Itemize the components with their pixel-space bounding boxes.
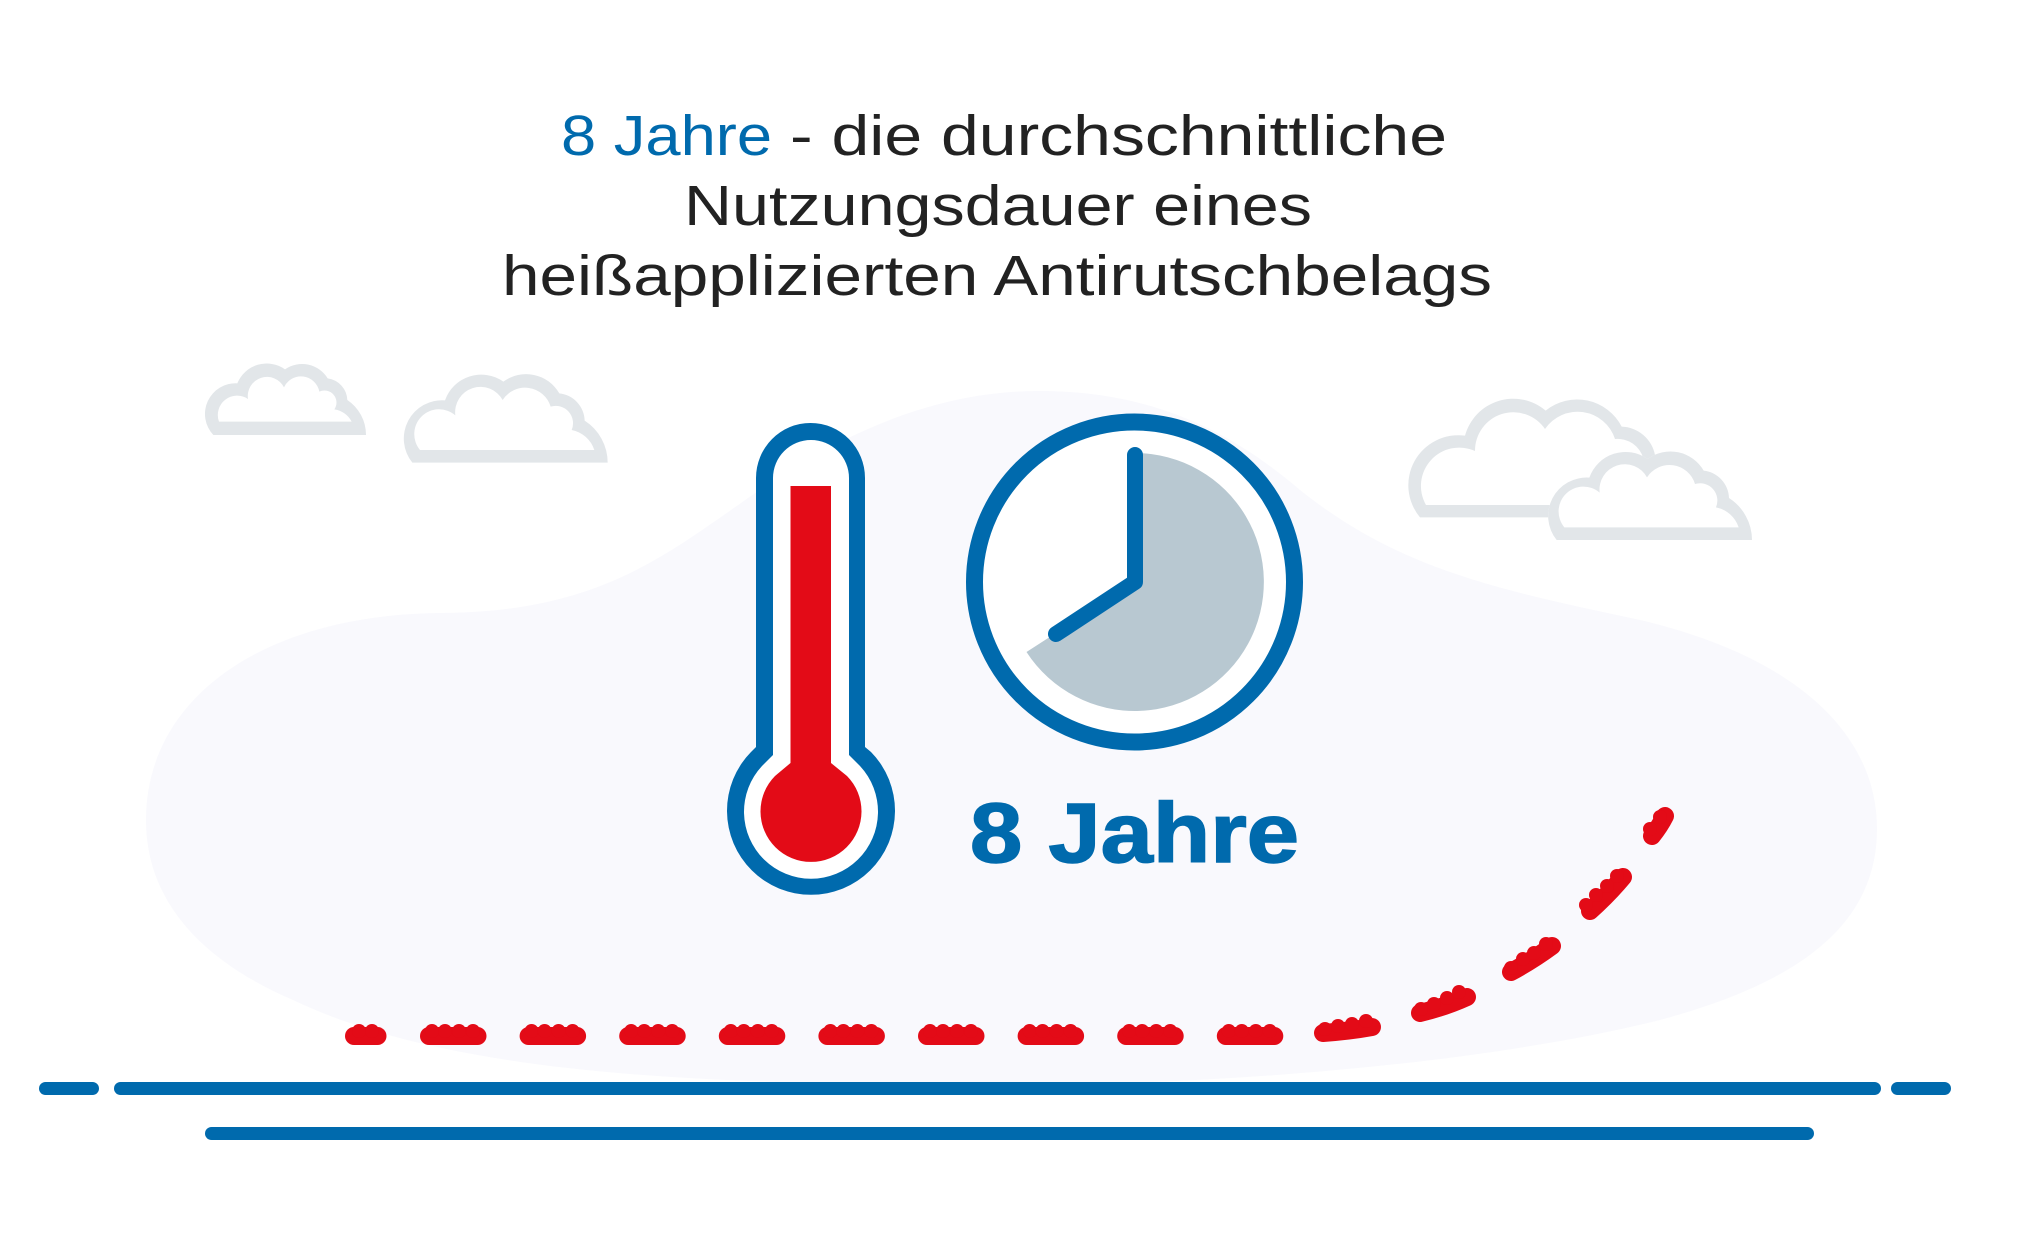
- title line 2: Nutzungsdauer eines: [684, 174, 1312, 238]
- dash 15 rising: [1643, 810, 1667, 836]
- cloud: right front: [1548, 451, 1752, 540]
- cloud: right back: [1408, 399, 1655, 517]
- dash 14 rising: [1579, 869, 1624, 912]
- cloud: left small: [205, 364, 366, 435]
- title highlight: 8 Jahre: 8 Jahre: [561, 104, 772, 168]
- title line 3: heißapplizierten Antirutschbelags: [502, 244, 1492, 308]
- road line upper: [39, 1082, 1951, 1095]
- background blob: [146, 391, 1877, 1085]
- dash 6: [818, 1024, 885, 1045]
- big label: 8 Jahre: 8 Jahre: [970, 786, 1299, 880]
- cloud: left large: [404, 374, 608, 463]
- dash 8: [1018, 1024, 1084, 1045]
- dash 1: [345, 1024, 386, 1045]
- road line lower: [205, 1127, 1814, 1140]
- dash 5: [719, 1024, 785, 1045]
- dash 2: [420, 1024, 486, 1045]
- title: [502, 104, 1492, 308]
- dash 9: [1117, 1024, 1184, 1045]
- dash 7: [918, 1024, 984, 1045]
- icon: clock: [974, 422, 1294, 742]
- anti-slip coating dashes: [345, 810, 1667, 1045]
- dash 4: [619, 1024, 686, 1045]
- dash 3: [520, 1024, 586, 1045]
- dash 11 rising: [1318, 1014, 1373, 1036]
- icon: thermometer: [727, 423, 895, 895]
- dash 10: [1217, 1024, 1283, 1045]
- title line 1: - die durchschnittliche: [790, 104, 1447, 168]
- dash 13 rising: [1504, 937, 1553, 975]
- dash 12 rising: [1414, 985, 1467, 1016]
